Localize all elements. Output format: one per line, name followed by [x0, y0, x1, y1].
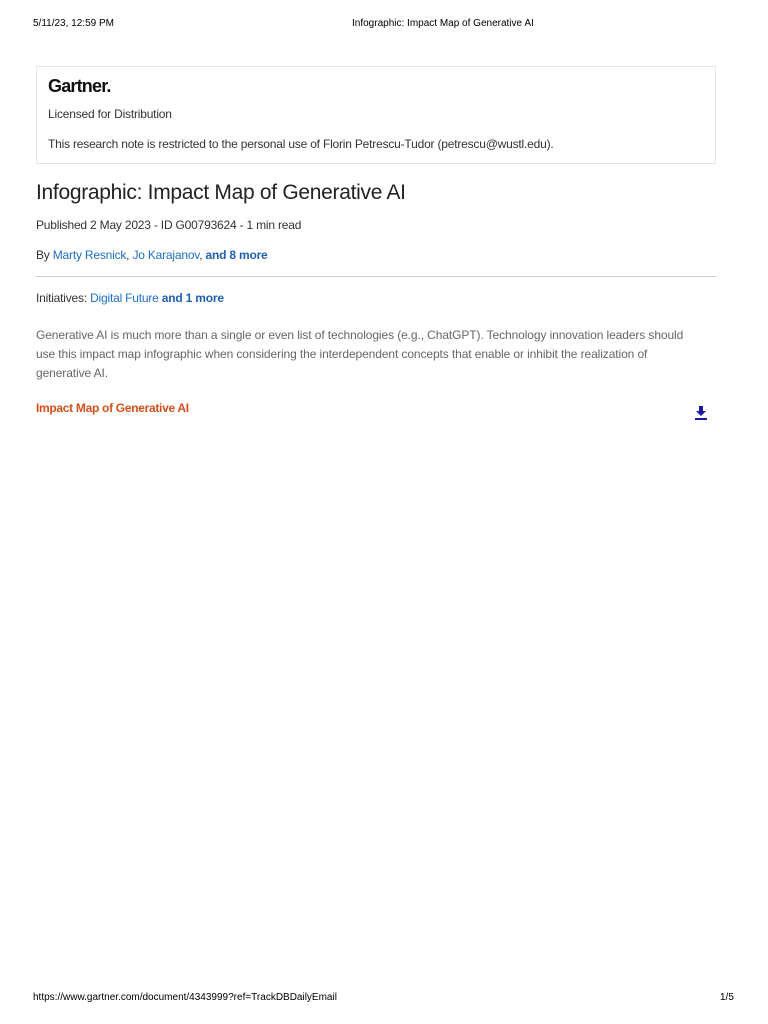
- license panel: [36, 66, 716, 164]
- authors: By Marty Resnick, Jo Karajanov, and 8 more: [36, 248, 268, 262]
- footer url: https://www.gartner.com/document/4343999?ref=TrackDBDailyEmail: [33, 992, 337, 1003]
- licensed text: Licensed for Distribution: [48, 107, 172, 121]
- published meta: Published 2 May 2023 - ID G00793624 - 1 min read: [36, 218, 301, 232]
- footer page number: 1/5: [720, 992, 734, 1003]
- infographic link: Impact Map of Generative AI: [36, 401, 189, 415]
- summary paragraph: use this impact map infographic when considering the interdependent concepts that enable or inhibit the realization of: [36, 347, 647, 361]
- title: Infographic: Impact Map of Generative AI: [36, 181, 406, 204]
- header page title: Infographic: Impact Map of Generative AI: [352, 18, 534, 29]
- initiatives: Initiatives: Digital Future and 1 more: [36, 291, 224, 305]
- restriction text: This research note is restricted to the personal use of Florin Petrescu-Tudor (petrescu@wustl.edu).: [48, 137, 554, 151]
- summary paragraph: [36, 328, 683, 380]
- summary paragraph: Generative AI is much more than a single or even list of technologies (e.g., ChatGPT). Technology innovation leaders should: [36, 328, 683, 342]
- header date: 5/11/23, 12:59 PM: [33, 18, 114, 29]
- summary paragraph: generative AI.: [36, 366, 108, 380]
- gartner logo: Gartner.: [48, 76, 111, 96]
- icon: download: [695, 406, 707, 420]
